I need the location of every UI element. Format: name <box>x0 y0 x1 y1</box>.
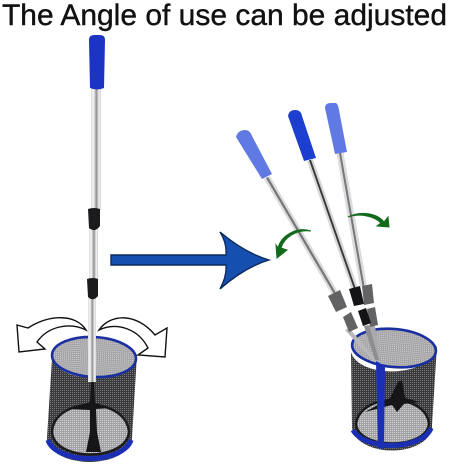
base bracket <box>365 380 420 412</box>
dark blue handle <box>288 110 316 161</box>
basket mesh body <box>47 354 137 462</box>
tube <box>307 159 358 290</box>
rotation arrow right <box>99 318 167 357</box>
lower tube <box>364 325 379 360</box>
right collector with tilted poles <box>236 103 437 451</box>
basket floor <box>52 405 129 454</box>
lower tube <box>345 328 377 362</box>
basket floor <box>356 400 429 444</box>
base bracket <box>68 378 112 452</box>
black collar upper <box>88 208 100 230</box>
left pole <box>87 35 105 382</box>
light blue handle <box>236 130 272 179</box>
center blue arrow <box>111 232 269 289</box>
middle tube <box>89 228 98 280</box>
gray collar lower <box>367 307 378 327</box>
black collar upper <box>349 286 364 306</box>
tube <box>264 176 338 295</box>
basket mesh body <box>351 345 437 451</box>
upper tube <box>91 88 101 210</box>
green arrow left <box>276 230 311 258</box>
bottom blue band <box>48 440 131 459</box>
gray collar upper <box>328 290 347 312</box>
basket opening <box>51 335 137 379</box>
left collector upright <box>17 35 167 462</box>
right basket <box>351 325 437 451</box>
gray collar upper <box>362 284 374 305</box>
lower tube <box>369 326 380 360</box>
tube <box>337 152 367 287</box>
blue vertical strip <box>376 361 385 449</box>
blue handle <box>89 35 105 90</box>
basket opening <box>351 325 437 371</box>
light blue handle <box>325 103 347 154</box>
rotation arrow left <box>17 318 86 352</box>
black collar lower <box>358 308 371 326</box>
left tilted pole <box>236 130 377 362</box>
black collar lower <box>87 278 98 299</box>
lower tube <box>88 298 96 382</box>
right tilted pole <box>325 103 380 360</box>
middle tilted pole <box>288 110 379 360</box>
bottom blue band <box>353 428 431 445</box>
left basket <box>47 335 137 462</box>
gray collar lower <box>343 312 358 332</box>
green arrow right <box>348 213 389 227</box>
